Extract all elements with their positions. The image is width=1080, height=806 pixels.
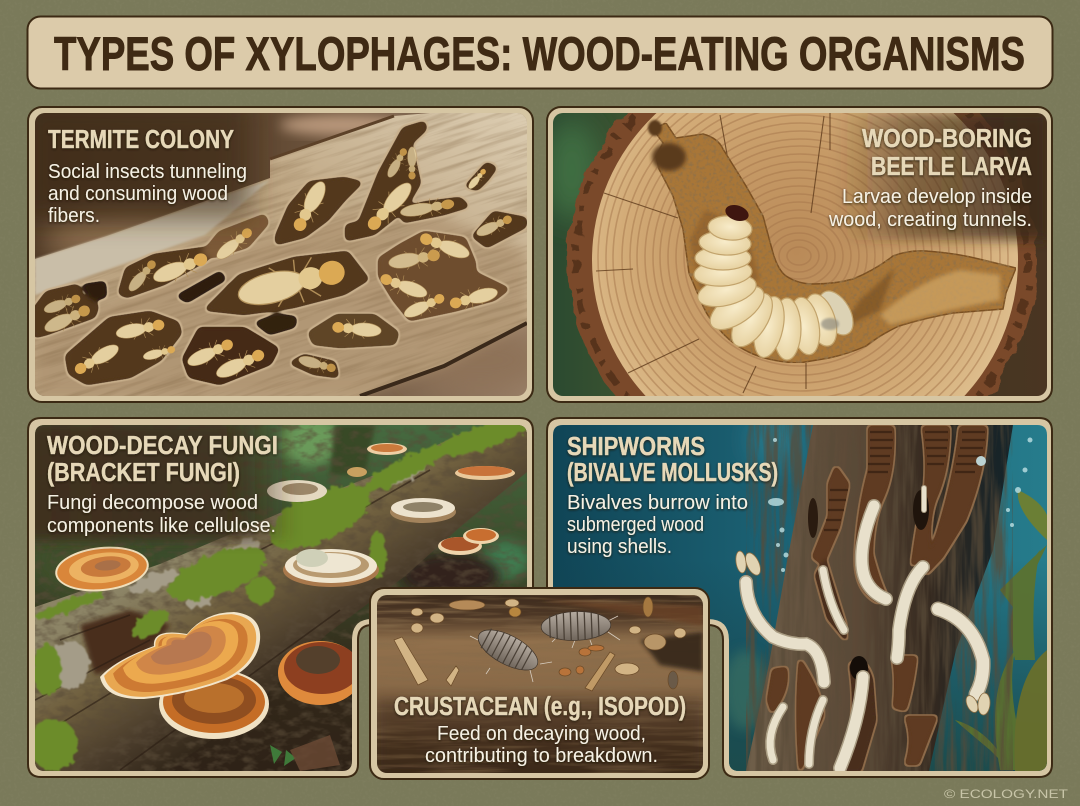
heading: shipworms bbox=[567, 433, 778, 487]
description: wood-boring beetle larva bbox=[828, 185, 1032, 231]
heading: wood-boring beetle larva: WOOD-BORING bbox=[862, 125, 1032, 153]
description: wood-decay fungi bbox=[47, 491, 276, 537]
description: wood-decay fungi: Fungi decompose wood bbox=[47, 491, 258, 514]
panel: shipworms bbox=[547, 410, 1052, 777]
description: wood-decay fungi: components like cellulose. bbox=[47, 514, 276, 537]
large orange bracket fungus, lower bbox=[159, 669, 269, 739]
white bracket fungus, centre bbox=[283, 549, 379, 587]
large orange bracket fungus, upper bbox=[100, 612, 260, 699]
credit: © ECOLOGY.NET bbox=[944, 787, 1069, 801]
description: crustacean: Feed on decaying wood, bbox=[437, 722, 646, 745]
shipworms in submerged wood illustration bbox=[553, 410, 1047, 771]
orange bracket fungus, left bbox=[55, 546, 149, 592]
panel: wood-boring beetle larva bbox=[546, 106, 1053, 403]
fungi on mossy log illustration bbox=[25, 410, 535, 771]
title banner bbox=[28, 16, 1052, 88]
heading: shipworms: SHIPWORMS bbox=[567, 433, 705, 461]
description: shipworms bbox=[567, 491, 748, 558]
description: shipworms: submerged wood bbox=[567, 513, 704, 536]
panel: wood-decay fungi bbox=[25, 410, 535, 777]
description: termite colony: and consuming wood bbox=[48, 182, 228, 205]
heading: crustacean: CRUSTACEAN (e.g., ISOPOD) bbox=[394, 693, 686, 721]
description: termite colony: Social insects tunneling bbox=[48, 160, 247, 183]
description: wood-boring beetle larva: wood, creating tunnels. bbox=[828, 208, 1032, 231]
description: crustacean: contributing to breakdown. bbox=[425, 744, 658, 767]
description: shipworms: Bivalves burrow into bbox=[567, 491, 748, 514]
heading: wood-boring beetle larva: BEETLE LARVA bbox=[871, 153, 1032, 181]
small bracket fungi on log bbox=[267, 443, 515, 555]
description: shipworms: using shells. bbox=[567, 535, 672, 558]
panel: termite colony bbox=[27, 106, 534, 403]
description: termite colony: fibers. bbox=[48, 204, 100, 227]
isopods on decaying wood illustration bbox=[377, 595, 703, 773]
dark bracket fungus, right bbox=[278, 641, 352, 705]
log cross-section illustration bbox=[553, 113, 1047, 396]
heading: wood-decay fungi bbox=[47, 432, 278, 487]
termite galleries illustration bbox=[35, 113, 527, 396]
heading: wood-decay fungi: (BRACKET FUNGI) bbox=[47, 459, 240, 487]
heading: shipworms: (BIVALVE MOLLUSKS) bbox=[567, 459, 778, 487]
shipworm shells bbox=[735, 550, 991, 715]
description: wood-boring beetle larva: Larvae develop inside bbox=[842, 185, 1032, 208]
beetle larva bbox=[693, 214, 860, 360]
panel: crustacean isopod bbox=[370, 588, 709, 779]
description: crustacean bbox=[425, 722, 658, 767]
heading: wood-decay fungi: WOOD-DECAY FUNGI bbox=[47, 432, 278, 460]
heading: wood-boring beetle larva bbox=[862, 125, 1032, 181]
heading: termite colony: TERMITE COLONY bbox=[48, 126, 234, 154]
description: termite colony bbox=[48, 160, 247, 227]
